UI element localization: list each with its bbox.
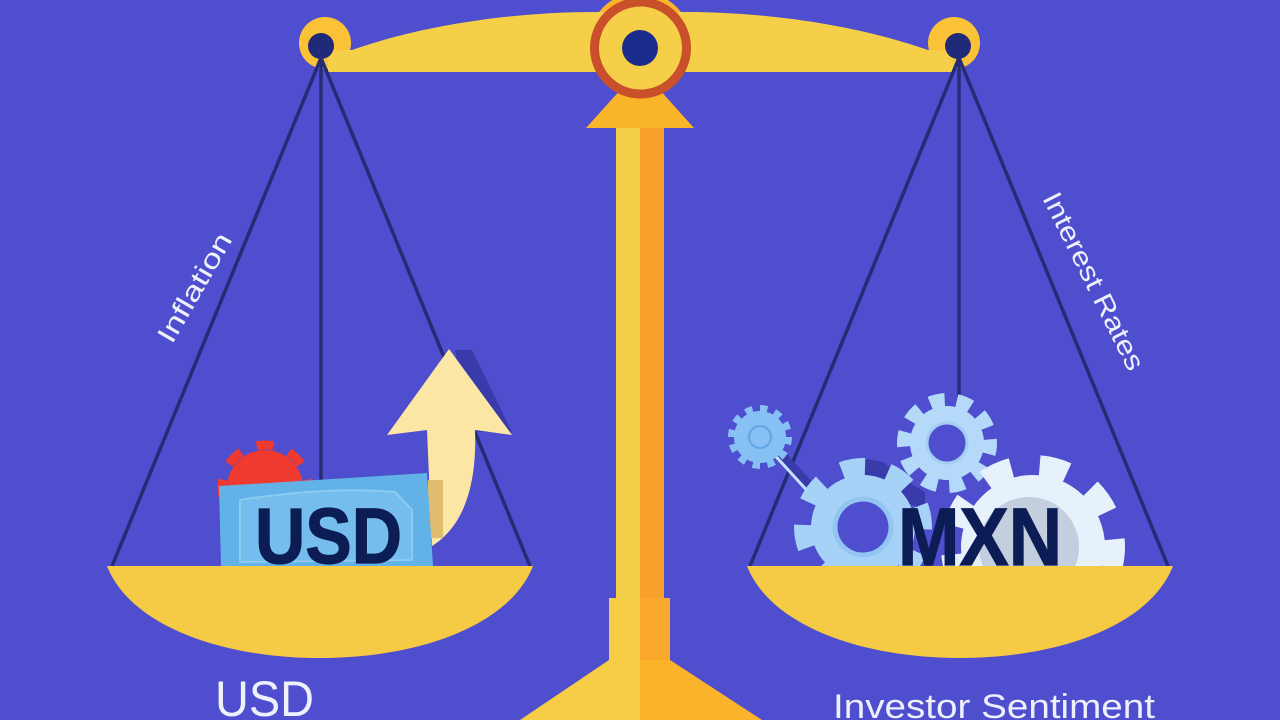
central pivot ring	[594, 2, 686, 94]
icon: top gear	[900, 396, 994, 490]
left pan	[107, 566, 533, 658]
icon: white gear	[941, 455, 1125, 566]
right pan	[747, 566, 1173, 658]
MXN label: MXN	[898, 492, 1062, 583]
label: Interest Rates: Interest Rates	[1037, 187, 1150, 375]
left pan strings	[112, 58, 530, 566]
label: Inflation: Inflation	[151, 227, 238, 348]
scale stand: pole and base	[520, 125, 762, 720]
icon: large blue gear	[794, 458, 932, 566]
icon: small blue gear	[732, 409, 823, 508]
icon: red gear	[218, 440, 312, 498]
right pan strings	[750, 58, 1168, 566]
USD label: USD	[255, 491, 402, 580]
icon: up arrow	[387, 349, 512, 546]
scale beam	[299, 0, 980, 96]
scale pivot bracket	[586, 68, 694, 128]
USD banknote	[219, 473, 433, 580]
